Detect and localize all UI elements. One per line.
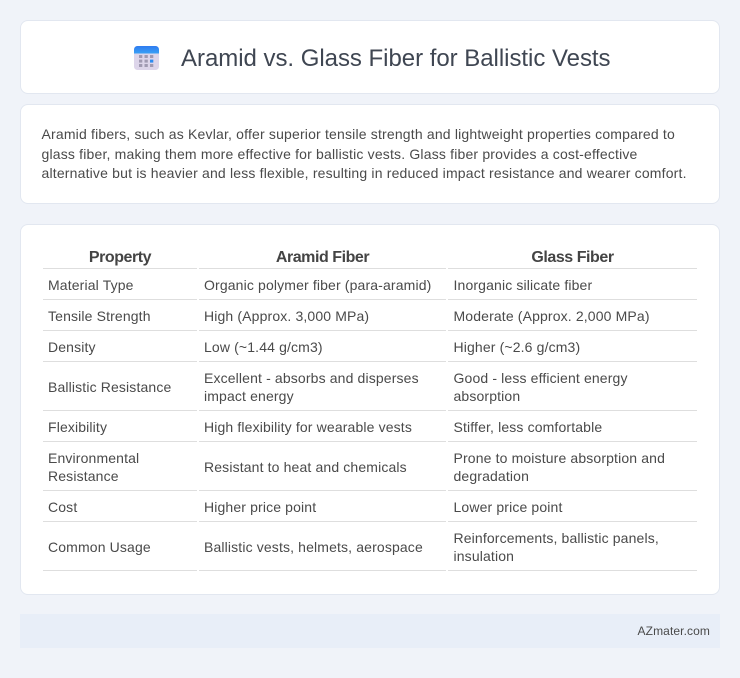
comparison table panel: Inorganic silicate fiber (454, 277, 592, 293)
column heading: Aramid Fiber: Aramid Fiber (276, 249, 369, 266)
comparison table panel: Higher price point (204, 499, 316, 515)
footer bar (20, 614, 720, 648)
comparison table panel: impact energy (204, 388, 294, 404)
footer credit: AZmater.com (638, 624, 710, 638)
comparison table panel: High (Approx. 3,000 MPa) (204, 308, 369, 324)
title: Aramid vs. Glass Fiber for Ballistic Vests (181, 45, 611, 72)
comparison table panel: Low (~1.44 g/cm3) (204, 339, 323, 355)
comparison table panel: Resistance (48, 468, 119, 484)
row: Cost (48, 499, 562, 515)
comparison table panel: Environmental (48, 450, 139, 466)
comparison table panel: Lower price point (454, 499, 562, 515)
comparison table panel: Material Type (48, 277, 134, 293)
comparison table panel: Stiffer, less comfortable (454, 419, 602, 435)
comparison table panel: Density (48, 339, 96, 355)
intro paragraph: alternative but is heavier and less flexible, resulting in reduced impact resistance and wearer comfort. (42, 165, 687, 181)
comparison table panel: High flexibility for wearable vests (204, 419, 412, 435)
comparison table panel: Ballistic vests, helmets, aerospace (204, 539, 423, 555)
comparison table panel: Moderate (Approx. 2,000 MPa) (454, 308, 650, 324)
comparison table panel: Common Usage (48, 539, 151, 555)
comparison table panel: insulation (454, 548, 514, 564)
column heading: Property: Property (89, 249, 151, 266)
comparison table panel: Resistant to heat and chemicals (204, 459, 407, 475)
table card background (20, 224, 720, 595)
row: Environmental Resistance (48, 450, 665, 484)
row: Material Type (48, 277, 592, 293)
intro paragraph (42, 126, 687, 181)
comparison table panel: degradation (454, 468, 529, 484)
comparison table panel: Good - less efficient energy (454, 370, 628, 386)
comparison table panel: Ballistic Resistance (48, 379, 171, 395)
comparison table panel: Tensile Strength (48, 308, 151, 324)
comparison table panel: Higher (~2.6 g/cm3) (454, 339, 580, 355)
comparison table panel: Excellent - absorbs and disperses (204, 370, 419, 386)
intro text panel (20, 104, 720, 204)
intro paragraph: glass fiber, making them more effective for ballistic vests. Glass fiber provides a cost-effective (42, 146, 638, 162)
column heading: Glass Fiber: Glass Fiber (531, 249, 614, 266)
comparison table panel: Cost (48, 499, 77, 515)
row: Ballistic Resistance (48, 370, 628, 404)
header panel (20, 20, 720, 94)
row: Common Usage (48, 530, 659, 564)
comparison table panel: Reinforcements, ballistic panels, (454, 530, 659, 546)
comparison table panel: Prone to moisture absorption and (454, 450, 665, 466)
row: Tensile Strength (48, 308, 650, 324)
comparison table panel: absorption (454, 388, 520, 404)
icon: calendar (134, 46, 159, 70)
intro paragraph: Aramid fibers, such as Kevlar, offer superior tensile strength and lightweight properties compared to (42, 126, 675, 142)
row: Flexibility (48, 419, 602, 435)
comparison table panel: Organic polymer fiber (para-aramid) (204, 277, 431, 293)
row: Density (48, 339, 580, 355)
comparison table panel: Flexibility (48, 419, 107, 435)
